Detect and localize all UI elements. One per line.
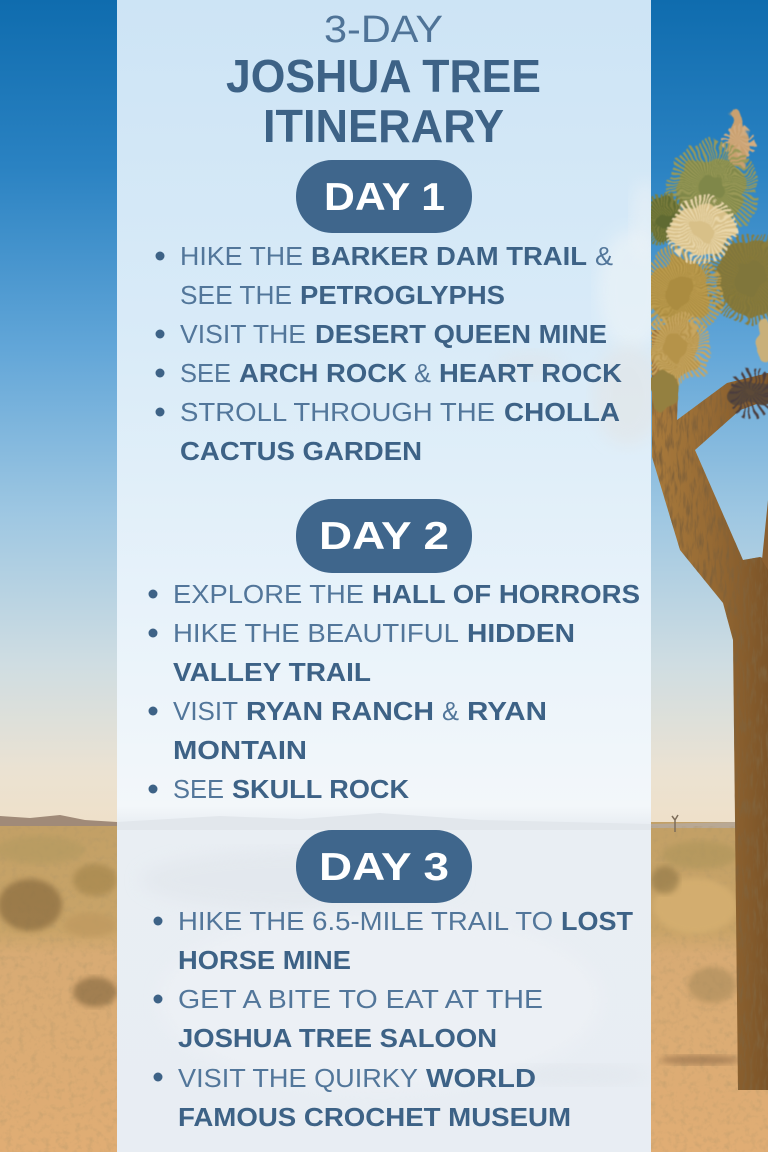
list: Day 1 activities: HIKE THE — [180, 241, 303, 271]
list: Day 2 activities: SEE — [173, 774, 224, 804]
heading: Day 2 badge — [296, 499, 472, 573]
Joshua tree photo illustration — [647, 110, 768, 1090]
list: Day 2 activities — [148, 579, 640, 804]
translucent text panel — [117, 0, 666, 1152]
list: Day 3 activities: LOST — [561, 906, 633, 936]
heading: Day 1 badge: DAY 1 — [324, 176, 445, 219]
list: Day 3 activities: HORSE MINE — [178, 945, 351, 975]
heading: Day 1 badge — [296, 160, 472, 233]
background: desert ground — [0, 815, 768, 1152]
list: Day 1 activities: DESERT QUEEN MINE — [315, 319, 607, 349]
background: desert sky — [0, 0, 768, 830]
list: Day 2 activities: SKULL ROCK — [232, 774, 409, 804]
heading: Day 3 badge: DAY 3 — [319, 846, 449, 889]
heading: Day 3 badge — [296, 830, 472, 903]
list: Day 1 activities: HEART ROCK — [439, 358, 622, 388]
list: Day 1 activities: SEE — [180, 358, 231, 388]
title: JOSHUA TREE — [226, 50, 541, 102]
list: Day 1 activities: STROLL THROUGH THE — [180, 397, 495, 427]
list: Day 1 activities: PETROGLYPHS — [300, 280, 505, 310]
list: Day 1 activities: & — [414, 358, 431, 388]
list: Day 3 activities — [154, 906, 633, 1132]
list: Day 1 activities: & — [595, 241, 613, 271]
title: 3-DAY — [324, 9, 443, 51]
list: Day 2 activities: HIKE THE BEAUTIFUL — [173, 618, 459, 648]
heading: Day 2 badge: DAY 2 — [319, 515, 449, 558]
list: Day 1 activities: SEE THE — [180, 280, 292, 310]
list: Day 3 activities: HIKE THE 6.5-MILE TRAIL TO — [178, 906, 553, 936]
tree foliage — [647, 110, 768, 414]
list: Day 2 activities: RYAN RANCH — [246, 696, 434, 726]
list: Day 1 activities: ARCH ROCK — [239, 358, 407, 388]
list: Day 3 activities: VISIT THE QUIRKY — [178, 1063, 418, 1093]
title: ITINERARY — [263, 100, 504, 152]
list: Day 1 activities — [156, 241, 622, 466]
list: Day 3 activities: WORLD — [426, 1063, 536, 1093]
title — [226, 9, 541, 152]
list: Day 2 activities: RYAN — [467, 696, 547, 726]
list: Day 3 activities: JOSHUA TREE SALOON — [178, 1023, 497, 1053]
list: Day 1 activities: VISIT THE — [180, 319, 306, 349]
list: Day 2 activities: VALLEY TRAIL — [173, 657, 371, 687]
list: Day 2 activities: MONTAIN — [173, 735, 307, 765]
list: Day 3 activities: GET A BITE TO EAT AT THE — [178, 984, 543, 1014]
list: Day 1 activities: CHOLLA — [504, 397, 620, 427]
list: Day 1 activities: CACTUS GARDEN — [180, 436, 422, 466]
tree trunk and branches — [651, 330, 768, 1090]
list: Day 3 activities: FAMOUS CROCHET MUSEUM — [178, 1102, 571, 1132]
list: Day 2 activities: HIDDEN — [467, 618, 575, 648]
list: Day 2 activities: HALL OF HORRORS — [372, 579, 640, 609]
list: Day 2 activities: VISIT — [173, 696, 238, 726]
small distant Joshua tree — [672, 815, 678, 832]
list: Day 2 activities: & — [442, 696, 459, 726]
list: Day 2 activities: EXPLORE THE — [173, 579, 364, 609]
list: Day 1 activities: BARKER DAM TRAIL — [311, 241, 587, 271]
